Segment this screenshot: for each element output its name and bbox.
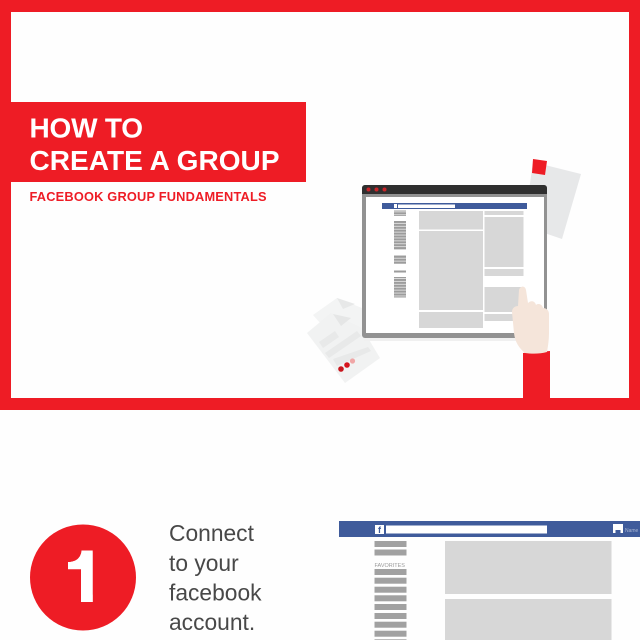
window buttons [366,188,386,192]
subtitle: FACEBOOK GROUP FUNDAMENTALS [30,189,267,204]
heading: how to create a group: CREATE A GROUP [30,145,280,176]
sidebar list [374,541,406,640]
icon: profile [613,524,623,533]
facebook top bar: Name [625,528,639,534]
content blocks [445,541,612,640]
illustration: tablet with hand and papers [307,159,581,398]
icon: pointing hand [512,287,549,354]
panel: red hero frame [0,0,640,410]
icon: sticky note page [524,159,581,239]
facebook top bar [339,521,640,537]
icon: stacked papers [307,298,380,383]
tablet [362,185,547,341]
title banner [0,102,306,182]
sidebar list: FAVORITES [374,563,405,569]
step 1 badge: 1 [66,538,106,618]
sidebar list [394,210,406,298]
step 1 text: facebook [169,580,262,606]
icon: red sleeve [523,351,550,398]
step 1 text: Connect [169,520,255,546]
step 1 text: account. [169,609,255,635]
step 1 badge [30,524,136,630]
facebook page mockup [339,521,640,640]
step 1 text: to your [169,550,239,576]
heading: how to create a group: HOW TO [30,112,143,144]
facebook top bar [382,203,527,209]
content blocks [419,211,524,328]
facebook top bar: f [378,525,382,535]
